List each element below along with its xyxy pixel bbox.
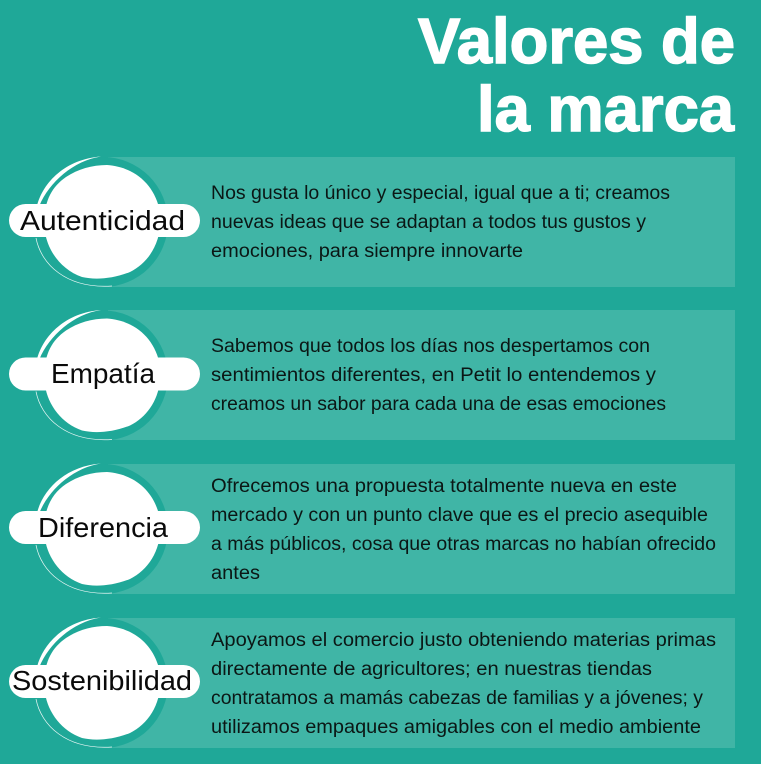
- title: Valores de: [418, 5, 735, 77]
- text: Empatía description: Sabemos que todos los días nos despertamos con: [211, 336, 650, 357]
- text: Diferencia description: a más públicos, cosa que otras marcas no habían ofrecido: [211, 534, 716, 555]
- icon: Sostenibilidad badge: [9, 618, 200, 748]
- icon: Sostenibilidad badge: Sostenibilidad: [12, 665, 192, 696]
- icon: Autenticidad badge: Autenticidad: [20, 205, 185, 236]
- panel: Diferencia: [9, 464, 735, 594]
- icon: Empatía badge: [9, 310, 200, 440]
- panel: Empatía: [9, 310, 735, 440]
- title: la marca: [477, 73, 734, 145]
- icon: Diferencia badge: [9, 464, 200, 594]
- icon: Empatía badge: Empatía: [51, 358, 156, 389]
- text: Diferencia description: [211, 476, 716, 584]
- text: Sostenibilidad description: [211, 630, 716, 738]
- icon: Autenticidad badge: [9, 156, 200, 287]
- panel: Autenticidad: [9, 156, 735, 287]
- text: Sostenibilidad description: Apoyamos el comercio justo obteniendo materias primas: [211, 630, 716, 651]
- text: Empatía description: [211, 336, 666, 415]
- text: Diferencia description: Ofrecemos una propuesta totalmente nueva en este: [211, 476, 677, 497]
- text: Autenticidad description: Nos gusta lo único y especial, igual que a ti; creamos: [211, 183, 670, 204]
- panel: Sostenibilidad: [9, 618, 735, 748]
- text: Diferencia description: mercado y con un punto clave que es el precio asequible: [211, 505, 708, 526]
- text: Sostenibilidad description: directamente de agricultores; en nuestras tiendas: [211, 659, 652, 680]
- text: Autenticidad description: emociones, para siempre innovarte: [211, 241, 523, 262]
- icon: Diferencia badge: Diferencia: [38, 512, 169, 543]
- text: Sostenibilidad description: contratamos a mamás cabezas de familias y a jóvenes; y: [211, 688, 703, 709]
- text: Autenticidad description: [211, 183, 670, 262]
- text: Autenticidad description: nuevas ideas que se adaptan a todos tus gustos y: [211, 212, 647, 233]
- text: Empatía description: sentimientos diferentes, en Petit lo entendemos y: [211, 365, 657, 386]
- text: Sostenibilidad description: utilizamos empaques amigables con el medio ambiente: [211, 717, 701, 738]
- text: Diferencia description: antes: [211, 563, 260, 584]
- title: [418, 5, 735, 145]
- text: Empatía description: creamos un sabor para cada una de esas emociones: [211, 394, 666, 415]
